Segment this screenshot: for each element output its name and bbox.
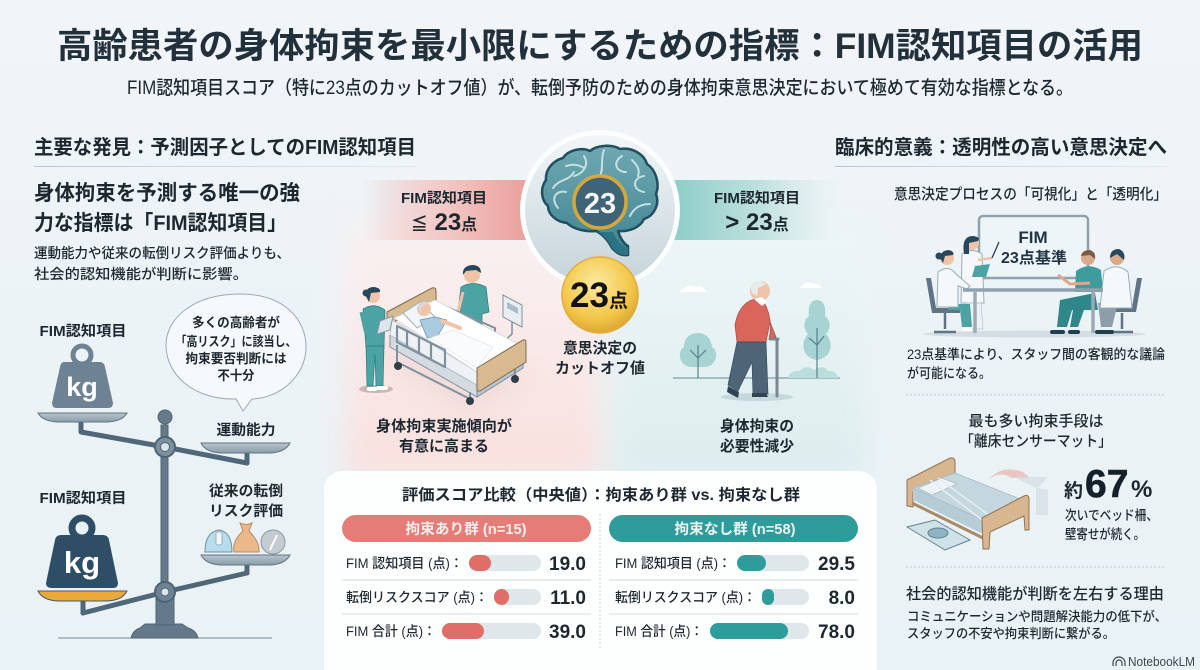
text: why social cognition matters: コミュニケーションや問題解決能力の低下が、: [907, 609, 1167, 624]
text: cutoff label: カットオフ値: [555, 360, 645, 377]
label: FIM upper: FIM認知項目: [40, 323, 126, 340]
sensor mat: [907, 520, 970, 550]
text: objective discussion: 23点基準により、スタッフ間の客観的な議論: [907, 346, 1165, 362]
presenter: [961, 236, 999, 329]
label: FIM lower: FIM認知項目: [40, 490, 126, 507]
row: FIM total: FIM 合計 (点)：: [346, 624, 436, 639]
stat: 67 percent: 67: [1085, 463, 1128, 506]
text: restraint need decreases: 必要性減少: [720, 437, 794, 455]
row: FIM cognitive: FIM 認知項目 (点)：: [346, 555, 463, 571]
row: FIM cognitive: [346, 554, 586, 575]
row: FIM cognitive: 29.5: [818, 554, 855, 575]
scale base and post: [131, 410, 198, 638]
callout: speech bubble: 多くの高齢者が: [192, 315, 280, 330]
icon: bed and sensor mat: [907, 458, 1048, 550]
callout: speech bubble: [166, 294, 306, 411]
label: fall risk: リスク評価: [209, 503, 283, 520]
icon: cutoff medal: [562, 257, 638, 333]
icon: team meeting: FIM: [1018, 228, 1048, 247]
text: supporting note: 運動能力や従来の転倒リスク評価よりも、: [34, 245, 290, 261]
heading: score comparison: 評価スコア比較（中央値）：拘束あり群 vs. 拘束なし群: [402, 486, 801, 504]
text: most common method: [960, 412, 1112, 450]
row: fall risk: 転倒リスクスコア (点)：: [615, 590, 756, 605]
row: FIM total: 39.0: [549, 622, 586, 643]
panel: center background: [345, 225, 867, 480]
bed frame: [390, 335, 523, 405]
text: next methods: 次いでベッド柵、: [1065, 508, 1158, 523]
icon: team meeting: 23点基準: [1001, 248, 1067, 267]
text: objective discussion: が可能になる。: [907, 365, 991, 381]
icon: team meeting: [922, 216, 1146, 338]
callout: speech bubble: 不十分: [218, 368, 254, 383]
row: fall risk: 転倒リスクスコア (点)：: [346, 590, 488, 605]
table: [963, 288, 1103, 292]
far nurse: [458, 265, 489, 336]
footboard: [477, 340, 526, 391]
panel: right band > 23: > 23点: [725, 209, 789, 236]
bed headboard: [387, 288, 436, 323]
panel: left band ≤ 23: ≦ 23点: [411, 209, 477, 236]
row: FIM total: [346, 622, 586, 643]
icon: cutoff medal: 23点: [570, 276, 628, 315]
text: restraint need decreases: 身体拘束の: [720, 417, 794, 435]
mattress: [390, 300, 520, 385]
text: why social cognition matters: 社会的認知機能が判断を左右する理由: [906, 584, 1164, 603]
upper beam: [81, 422, 247, 463]
near rail: [397, 326, 445, 367]
frame: [912, 503, 983, 538]
stat: 67 percent: 約: [1064, 480, 1083, 502]
heading: clinical implications: 臨床的意義：透明性の高い意思決定へ: [835, 136, 1167, 159]
callout: speech bubble: 「高リスク」に該当し、: [176, 334, 296, 349]
row: fall risk: 11.0: [550, 588, 586, 609]
icon: lower weight: [46, 518, 118, 588]
text: restraint need decreases: [720, 417, 794, 455]
pink motion arc: [988, 469, 1030, 480]
mattress: [913, 488, 983, 534]
icons: risk items: [205, 523, 285, 554]
icon: upper weight: kg: [66, 372, 98, 402]
whiteboard: [979, 216, 1088, 278]
chart: balance scales: [38, 294, 306, 638]
panel: clinical implications: [835, 136, 1167, 641]
row: fall risk: 8.0: [829, 588, 855, 609]
label: fall risk: [209, 482, 283, 520]
row: FIM total: FIM 合計 (点)：: [615, 624, 703, 639]
group: unrestrained: [609, 515, 858, 643]
text: lead statement: 力な指標は「FIM認知項目」: [34, 212, 287, 235]
stat: 67 percent: %: [1131, 476, 1152, 503]
upper left pan: [38, 413, 127, 422]
text: lead statement: [34, 182, 300, 235]
panel: left band ≤ 23: FIM認知項目: [401, 190, 487, 207]
footboard: [982, 495, 1029, 549]
headboard: [907, 458, 955, 507]
far rail: [447, 307, 495, 339]
monitor: [502, 295, 522, 343]
text: cutoff label: [555, 339, 645, 377]
text: most common method: 「離床センサーマット」: [960, 433, 1112, 450]
row: FIM cognitive: FIM 認知項目 (点)：: [615, 555, 731, 571]
panel: right band > 23: FIM認知項目: [714, 190, 800, 207]
seated nurse right: [1052, 250, 1103, 332]
text: most common method: 最も多い拘束手段は: [968, 412, 1104, 430]
text: next methods: 壁寄せが続く。: [1065, 526, 1145, 542]
callout: speech bubble: 拘束要否判断には: [186, 351, 286, 366]
gray ghost: [1013, 477, 1048, 515]
row: fall risk: [346, 588, 586, 609]
group: unrestrained: 拘束なし群 (n=58): [674, 520, 796, 538]
row: fall risk: [615, 588, 855, 609]
text: restraint tendency: 有意に高まる: [399, 438, 489, 455]
panel: score comparison: [324, 471, 877, 670]
icon: upper weight: [52, 346, 113, 408]
upper right pan: [201, 443, 290, 453]
text: objective discussion: [907, 346, 1165, 381]
seated doctor right: [1097, 249, 1142, 332]
icon: elderly walker with trees: [673, 281, 840, 401]
subtitle: FIM認知項目スコア（特に23点のカットオフ値）が、転倒予防のための身体拘束意思決定において極めて有効な指標となる。: [127, 77, 1073, 99]
text: why social cognition matters: スタッフの不安や拘束判断に繋がる。: [907, 626, 1115, 641]
row: FIM total: 78.0: [818, 622, 855, 643]
lower left pan: [38, 591, 127, 601]
panel: left findings: [34, 136, 416, 282]
near nurse: [362, 287, 393, 389]
logo: NotebookLM: NotebookLM: [1128, 655, 1195, 669]
icon: brain disc: [522, 132, 678, 288]
patient: [403, 302, 493, 368]
stat: 67 percent: [1064, 463, 1152, 506]
text: supporting note: [34, 245, 290, 282]
text: visualization heading: 意思決定プロセスの「可視化」と「透明化」: [894, 186, 1167, 203]
icon: patient in bed with staff: [359, 265, 530, 408]
group: restrained: [342, 515, 591, 643]
title: 高齢患者の身体拘束を最小限にするための指標：FIM認知項目の活用: [57, 27, 1143, 66]
panel: right band > 23: [672, 180, 842, 240]
lower beam: [83, 562, 247, 613]
row: FIM cognitive: [615, 554, 855, 575]
lower right pan: [201, 555, 290, 565]
bed shadow: [372, 330, 530, 408]
text: supporting note: 社会的認知機能が判断に影響。: [34, 266, 248, 282]
label: motor ability: 運動能力: [216, 421, 276, 439]
text: lead statement: 身体拘束を予測する唯一の強: [34, 182, 300, 205]
icon: lower weight: kg: [64, 545, 100, 580]
label: fall risk: 従来の転倒: [209, 482, 283, 500]
row: FIM total: [615, 622, 855, 643]
text: next methods: [1065, 508, 1158, 542]
icon: brain disc: 23: [584, 188, 616, 220]
panel: left band ≤ 23: [363, 180, 528, 240]
text: restraint tendency: 身体拘束実施傾向が: [376, 417, 512, 435]
ground line: [58, 637, 272, 639]
text: why social cognition matters: [906, 584, 1167, 641]
heading: key findings: 主要な発見：予測因子としてのFIM認知項目: [34, 136, 416, 159]
row: FIM cognitive: 19.0: [549, 554, 586, 575]
text: restraint tendency: [376, 417, 512, 455]
text: cutoff label: 意思決定の: [563, 339, 637, 357]
seated doctor left: [926, 250, 972, 332]
group: restrained: 拘束あり群 (n=15): [406, 520, 527, 538]
